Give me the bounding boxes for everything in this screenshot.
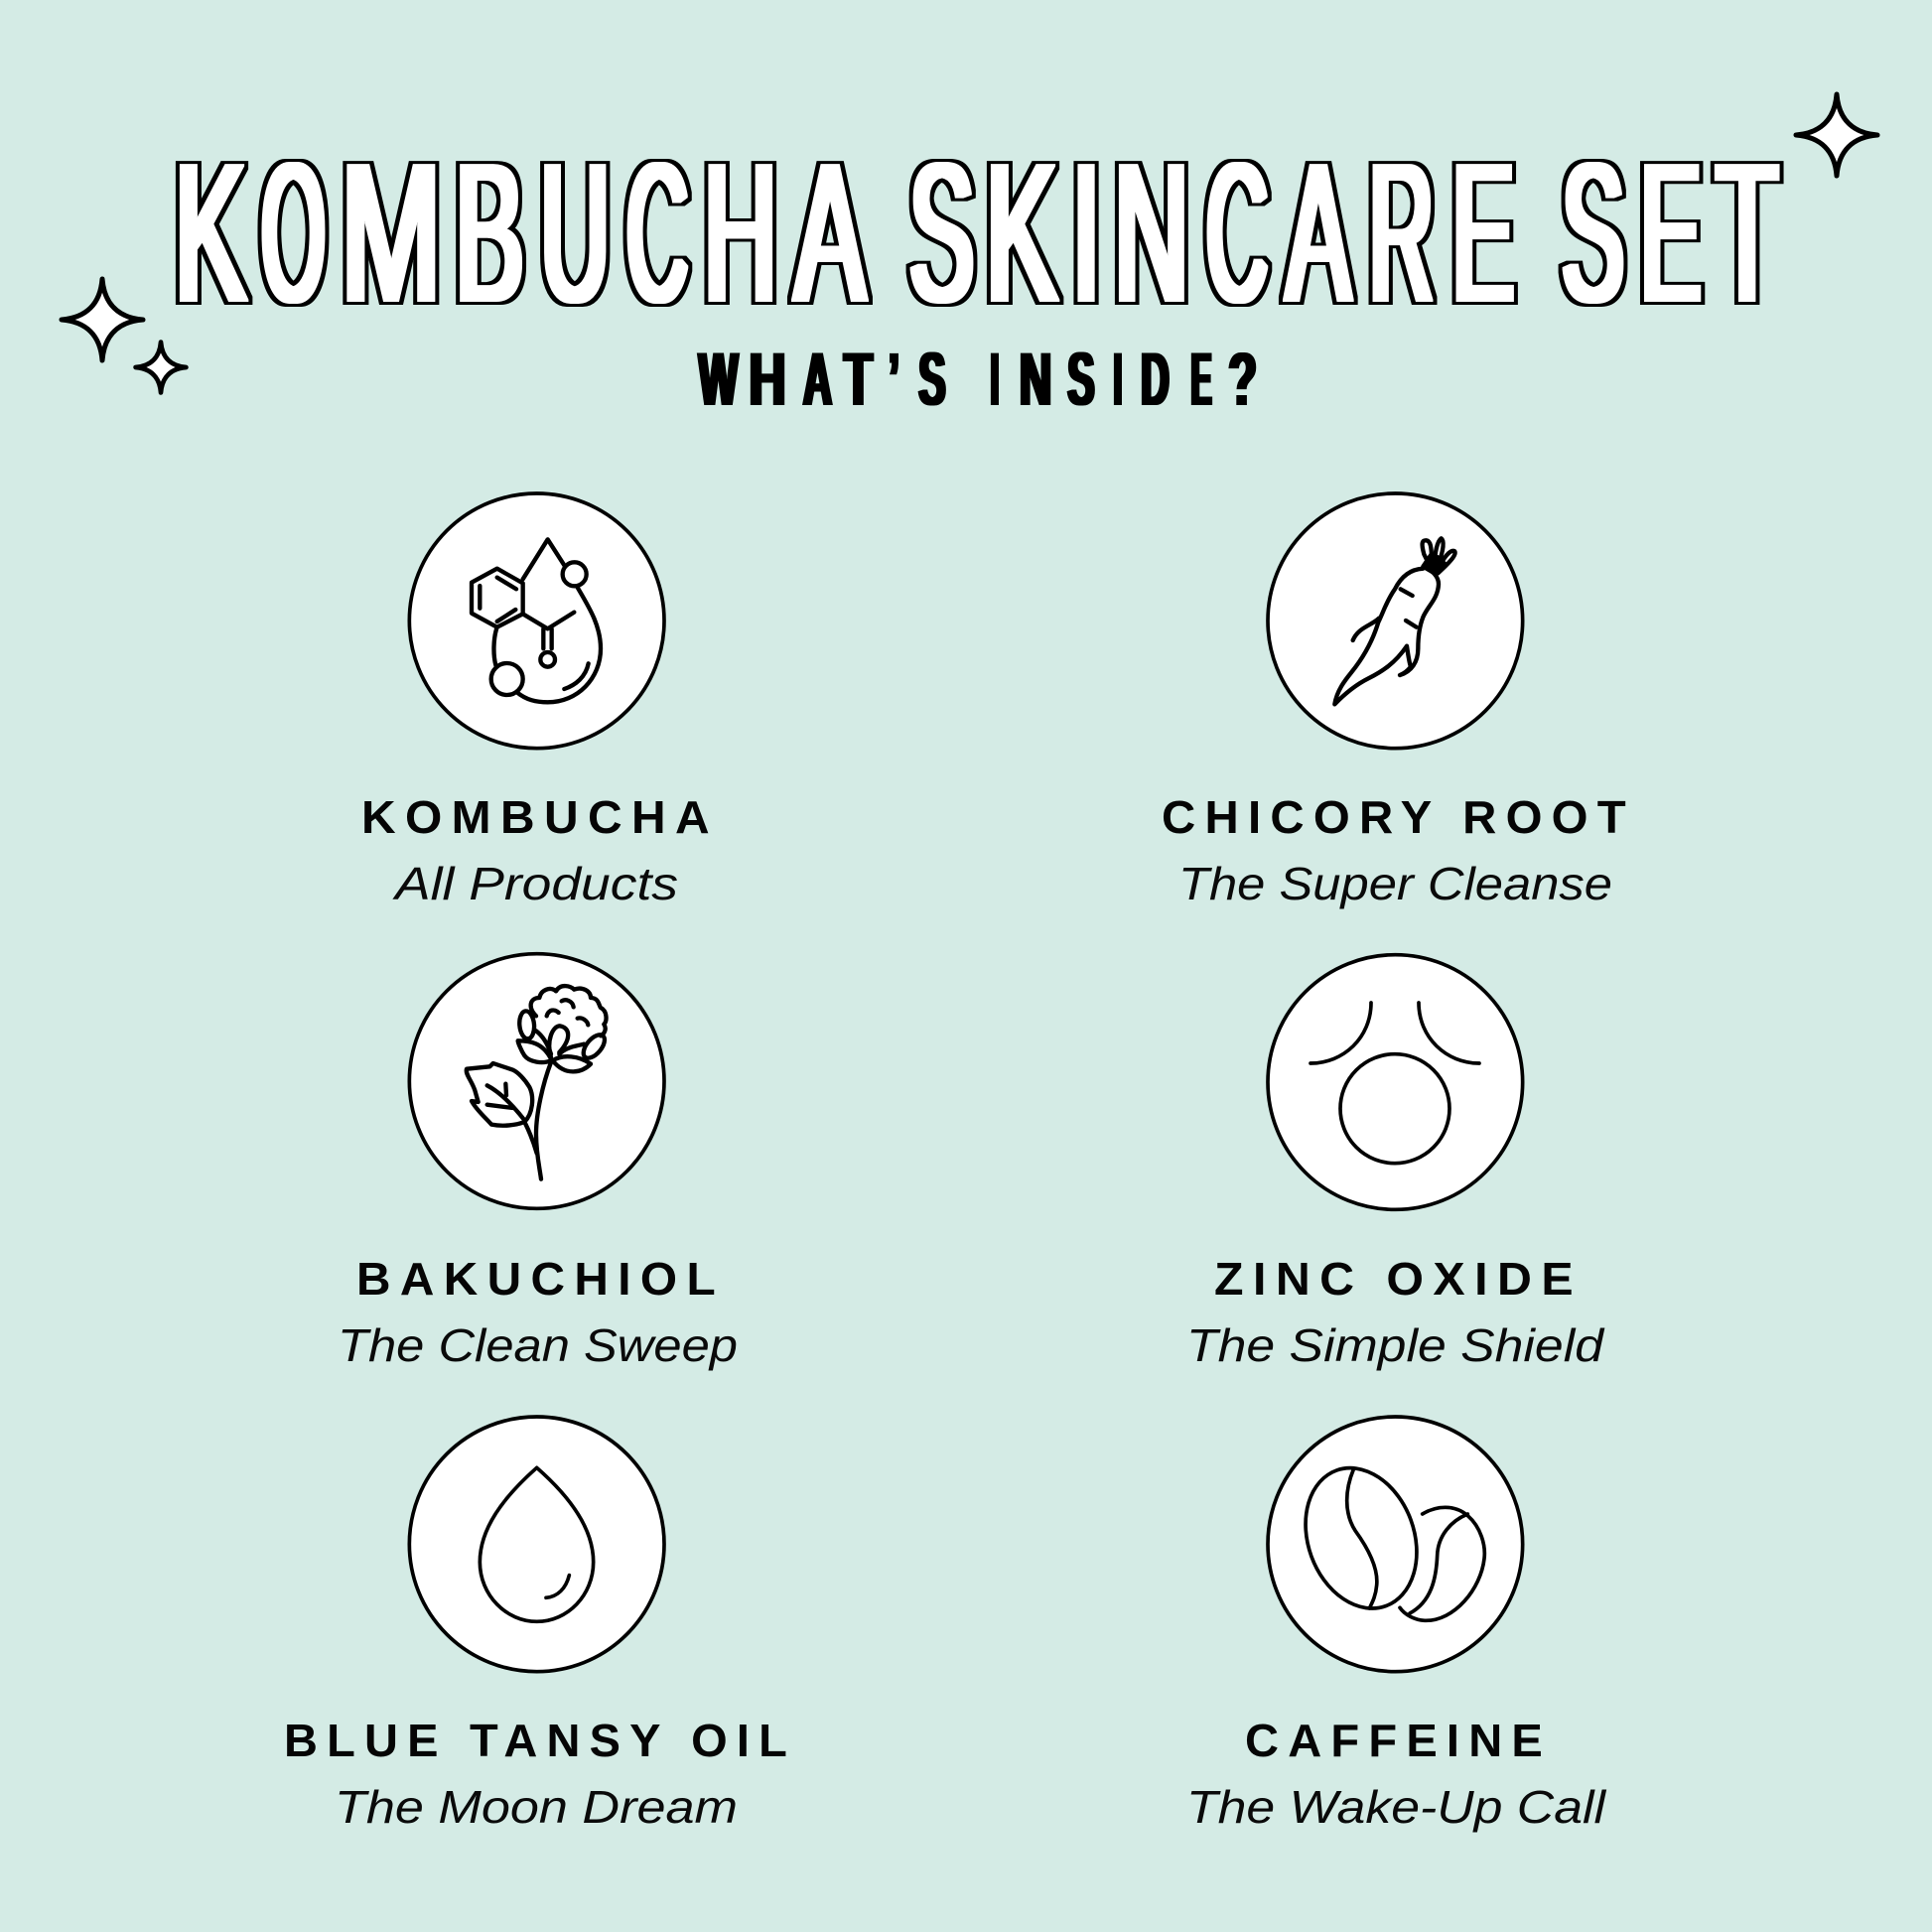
subtitle: ? (1228, 338, 1257, 422)
icon: sparkle top right (1796, 94, 1877, 176)
title: C (626, 123, 688, 344)
subtitle: D (1141, 338, 1170, 422)
heading: caffeine: CAFFEINE (1245, 1715, 1552, 1766)
panel: kombucha (361, 493, 719, 909)
text: the moon dream: The Moon Dream (335, 1781, 738, 1833)
panel: zinc oxide (1186, 955, 1605, 1371)
text: the wake-up call: The Wake-Up Call (1186, 1781, 1607, 1833)
icon: zinc oxide (1268, 955, 1523, 1209)
text: all products: All Products (392, 858, 678, 909)
subtitle: S (1067, 338, 1094, 422)
title: A (1287, 123, 1350, 344)
title: M (341, 123, 441, 344)
icon: flower (409, 954, 664, 1208)
title: S (909, 123, 974, 344)
subtitle: A (803, 338, 832, 422)
title: O (262, 123, 325, 344)
panel: chicory root (1162, 493, 1635, 909)
panel: blue tansy oil (284, 1417, 796, 1833)
title: B (456, 123, 524, 344)
icon: molecule droplet (409, 493, 664, 749)
icon: chicory root (1268, 493, 1523, 749)
icon: large sparkle left (62, 279, 143, 360)
text: the simple shield: The Simple Shield (1186, 1319, 1605, 1371)
subtitle: ’ (890, 338, 898, 422)
title: N (1114, 123, 1188, 344)
text: the super cleanse: The Super Cleanse (1178, 858, 1612, 909)
subtitle: W (699, 338, 738, 422)
title: I (1072, 123, 1100, 344)
icon: small sparkle left (136, 343, 186, 392)
subtitle: H (749, 338, 786, 422)
icon: coffee beans (1268, 1417, 1523, 1672)
panel: caffeine (1186, 1417, 1607, 1833)
title: A (795, 123, 865, 344)
heading: chicory root: CHICORY ROOT (1162, 791, 1635, 843)
subtitle: I (1114, 338, 1122, 422)
title: E (1452, 123, 1514, 344)
title: U (541, 123, 610, 344)
heading: blue tansy oil: BLUE TANSY OIL (284, 1715, 796, 1766)
subtitle: S (918, 338, 945, 422)
title: S (1562, 123, 1624, 344)
subtitle: I (991, 338, 999, 422)
title: H (704, 123, 776, 344)
heading: bakuchiol: BAKUCHIOL (356, 1253, 725, 1305)
title: K (986, 123, 1057, 344)
title: K (175, 123, 246, 344)
title: C (1206, 123, 1268, 344)
heading: zinc oxide: ZINC OXIDE (1214, 1253, 1583, 1305)
title: T (1716, 123, 1778, 344)
panel: bakuchiol (338, 954, 738, 1371)
subtitle: T (844, 338, 873, 422)
text: the clean sweep: The Clean Sweep (338, 1319, 738, 1371)
icon: oil drop (409, 1417, 664, 1672)
subtitle: E (1191, 338, 1211, 422)
subtitle: N (1020, 338, 1051, 422)
title: E (1640, 123, 1701, 344)
heading: kombucha: KOMBUCHA (361, 791, 719, 843)
title: R (1369, 123, 1434, 344)
